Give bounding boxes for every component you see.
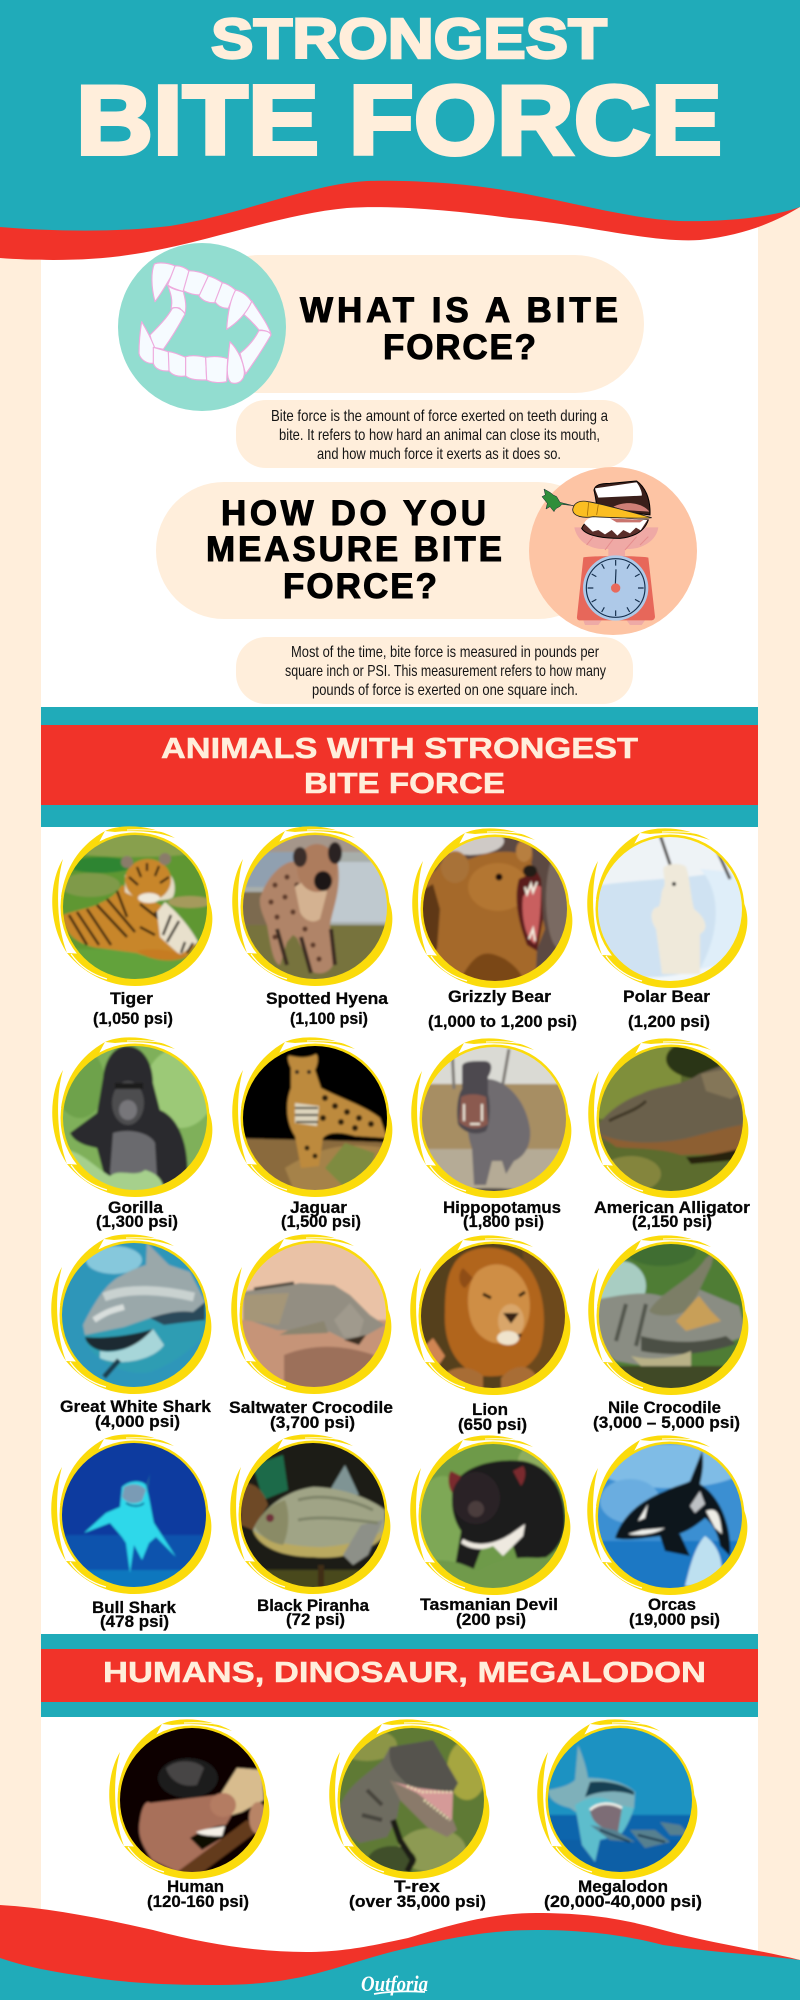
label: (4,000 psi) <box>95 1412 180 1431</box>
heading: FORCE? <box>283 567 437 606</box>
icon: mouth on weighing scale <box>529 467 697 635</box>
label: (20,000-40,000 psi) <box>544 1892 702 1911</box>
section banner: humans, dinosaur, megalodon: HUMANS, DINOSAUR, MEGALODON <box>103 1657 706 1689</box>
icon: open mouth <box>594 481 650 515</box>
label <box>96 1198 178 1231</box>
text block: bite force definition: Bite force is the amount of force exerted on teeth during a <box>271 408 608 425</box>
label: Polar Bear <box>623 987 710 1006</box>
label: (1,000 to 1,200 psi) <box>428 1012 577 1031</box>
label: Megalodon <box>578 1877 668 1896</box>
label <box>458 1400 527 1434</box>
label <box>544 1877 702 1911</box>
label: (650 psi) <box>458 1415 527 1434</box>
label: Grizzly Bear <box>448 987 551 1006</box>
heading pill <box>190 255 644 393</box>
label: Jaguar <box>290 1198 347 1217</box>
label: T-rex <box>394 1877 441 1896</box>
label: (3,700 psi) <box>270 1413 355 1432</box>
animal: bull shark <box>51 1434 214 1631</box>
label <box>349 1877 486 1911</box>
label: (478 psi) <box>100 1612 169 1631</box>
title <box>76 7 722 175</box>
label <box>443 1198 561 1231</box>
animal: american alligator <box>588 1038 751 1231</box>
animal: polar bear <box>587 828 750 1031</box>
section banner: animals: BITE FORCE <box>304 768 505 800</box>
label: Tasmanian Devil <box>420 1595 558 1614</box>
label <box>257 1596 370 1629</box>
heading: HOW DO YOU <box>221 494 486 533</box>
text block: PSI explanation: Most of the time, bite force is measured in pounds per <box>291 644 600 661</box>
label: Bull Shark <box>92 1598 177 1617</box>
animal: lion <box>410 1235 573 1434</box>
label <box>229 1398 393 1432</box>
label <box>266 989 389 1028</box>
icon: carrot <box>573 501 652 518</box>
animal: tiger <box>50 826 220 1028</box>
label <box>281 1198 361 1231</box>
label: Gorilla <box>108 1198 164 1217</box>
label: Hippopotamus <box>443 1198 561 1217</box>
label: (1,300 psi) <box>96 1212 178 1231</box>
text block: PSI explanation <box>236 637 633 704</box>
animal: gorilla <box>52 1037 215 1231</box>
animal: saltwater crocodile <box>229 1234 394 1432</box>
label: (2,150 psi) <box>632 1212 712 1231</box>
label: (1,800 psi) <box>463 1212 544 1231</box>
title: STRONGEST <box>211 7 607 71</box>
animal: orca <box>587 1435 750 1629</box>
label <box>92 1598 177 1631</box>
animal: tasmanian devil <box>410 1435 578 1629</box>
animal: nile crocodile <box>588 1235 751 1432</box>
heading <box>300 291 618 367</box>
label: Saltwater Crocodile <box>229 1398 393 1417</box>
label: American Alligator <box>594 1198 750 1217</box>
label: Human <box>167 1877 224 1896</box>
text block: bite force definition: bite. It refers to how hard an animal can close its mouth, <box>279 427 600 444</box>
text block: bite force definition <box>236 400 633 468</box>
animal: grizzly bear <box>412 827 577 1031</box>
heading: MEASURE BITE <box>206 530 502 569</box>
label <box>629 1595 720 1629</box>
label: (over 35,000 psi) <box>349 1892 486 1911</box>
icon: teal circle with fangs <box>118 243 286 411</box>
panel: what is a bite force <box>118 243 644 411</box>
label: Tiger <box>110 989 153 1008</box>
label: (72 psi) <box>286 1610 345 1629</box>
text block: PSI explanation: pounds of force is exerted on one square inch. <box>312 682 578 699</box>
title: BITE FORCE <box>76 65 722 175</box>
label: Black Piranha <box>257 1596 370 1615</box>
label: Nile Crocodile <box>608 1398 721 1417</box>
T-rex <box>329 1719 492 1911</box>
label: (3,000 – 5,000 psi) <box>593 1413 740 1432</box>
human <box>109 1719 272 1911</box>
animal: jaguar <box>232 1037 395 1231</box>
label <box>93 989 173 1028</box>
label <box>623 987 710 1031</box>
section banner: animals <box>41 707 758 827</box>
label: Orcas <box>648 1595 696 1614</box>
animal: black piranha <box>230 1434 393 1629</box>
label: (1,500 psi) <box>281 1212 361 1231</box>
label: (1,050 psi) <box>93 1009 173 1028</box>
bottom wave footer <box>0 1905 800 2000</box>
label: Lion <box>472 1400 508 1419</box>
label: (19,000 psi) <box>629 1610 720 1629</box>
label <box>420 1595 558 1629</box>
heading: WHAT IS A BITE <box>300 291 618 330</box>
animal: great white shark <box>51 1234 214 1431</box>
megalodon <box>537 1719 702 1911</box>
label: Great White Shark <box>60 1397 212 1416</box>
label <box>593 1398 740 1432</box>
label <box>428 987 577 1031</box>
label <box>60 1397 212 1431</box>
panel: how do you measure bite force <box>156 467 697 635</box>
label: (1,200 psi) <box>628 1012 710 1031</box>
text block: bite force definition: and how much force it exerts as it does so. <box>317 446 561 463</box>
label: (120-160 psi) <box>147 1892 249 1911</box>
section banner: animals: ANIMALS WITH STRONGEST <box>161 733 638 765</box>
label: (200 psi) <box>456 1610 526 1629</box>
animal: hippopotamus <box>411 1038 574 1231</box>
label: (1,100 psi) <box>290 1009 368 1028</box>
animal: spotted hyena <box>232 826 395 1028</box>
heading: FORCE? <box>383 328 536 367</box>
heading pill <box>156 482 606 619</box>
label <box>147 1877 249 1911</box>
label: Spotted Hyena <box>266 989 389 1008</box>
heading <box>206 494 502 606</box>
section banner: humans, dinosaur, megalodon <box>41 1634 758 1717</box>
top wave header <box>0 0 800 260</box>
text block: PSI explanation: square inch or PSI. This measurement refers to how many <box>285 663 606 680</box>
label <box>594 1198 750 1231</box>
logo: Outforia: Outforia <box>361 1971 428 1996</box>
